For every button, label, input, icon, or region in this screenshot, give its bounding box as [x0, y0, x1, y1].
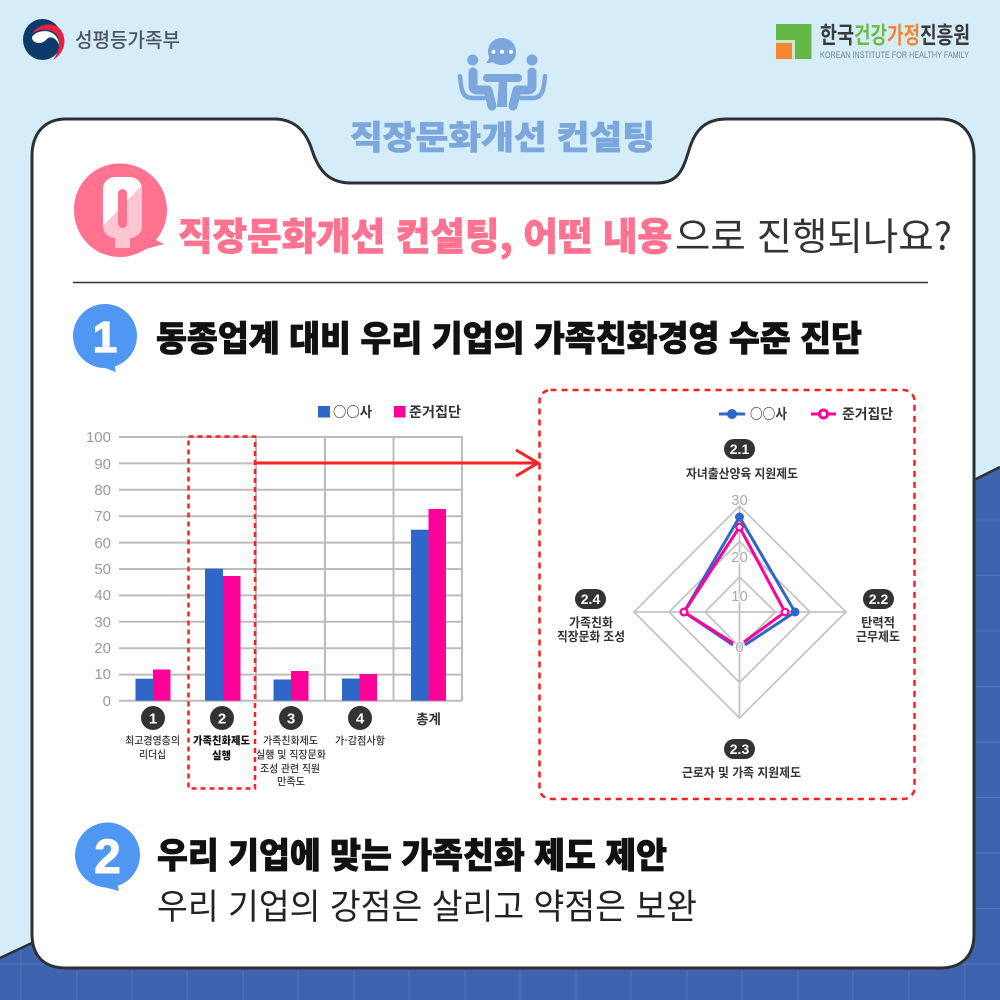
radar legend [719, 404, 893, 424]
radar axis values: 20 [731, 549, 748, 566]
icon: meeting at a table [460, 38, 545, 107]
axis label 2.4: 2.4 [581, 591, 600, 607]
category badges: 2 [218, 710, 226, 728]
logo: ministry emblem [23, 19, 64, 60]
axis label 2.3 [682, 739, 801, 781]
arrow to radar panel [255, 450, 538, 476]
radar axis values [731, 492, 748, 656]
icon: number 2 bubble [75, 822, 140, 891]
y axis labels: 50 [94, 561, 111, 578]
y axis labels: 80 [94, 482, 111, 499]
bar chart legend: 준거집단 [409, 402, 461, 422]
highlight box around category 2 [188, 436, 255, 788]
y axis labels: 90 [94, 456, 111, 473]
icon: number 2 bubble: 2 [94, 831, 121, 884]
radar grid [634, 506, 846, 718]
main title: 직장문화개선 컨설팅 [350, 111, 655, 159]
section 2 heading: 우리 기업에 맞는 가족친화 제도 제안 [157, 828, 667, 879]
background: blue grid corner [0, 467, 1000, 1000]
axis label 2.1: 자녀출산양육 지원제도 [686, 463, 798, 482]
question heading [178, 206, 952, 261]
section 1 heading: 동종업계 대비 우리 기업의 가족친화경영 수준 진단 [156, 311, 862, 362]
section 2 subtext: 우리 기업의 강점은 살리고 약점은 보완 [157, 879, 697, 930]
bar chart legend: ○○사 [333, 402, 372, 422]
question heading: 으로 진행되나요? [675, 206, 952, 261]
panel: radar chart [540, 390, 914, 799]
category badges: 3 [287, 710, 295, 728]
radar legend: ○○사 [750, 404, 787, 424]
category labels: 최고경영층의 [125, 733, 180, 748]
category labels: 실행 및 직장문화 [256, 747, 326, 762]
category badges [141, 706, 441, 730]
axis label 2.2 [856, 589, 900, 645]
radar series: reference group [681, 524, 788, 643]
icon: number 1 bubble [73, 304, 137, 372]
axis label 2.4 [557, 589, 625, 645]
axis label 2.3: 2.3 [730, 741, 749, 757]
y axis labels: 30 [94, 614, 111, 631]
axis label 2.1: 2.1 [730, 441, 749, 457]
category labels [125, 733, 385, 789]
y axis labels: 20 [94, 640, 111, 657]
y axis labels [86, 429, 111, 710]
category badges: 총계 [416, 708, 441, 728]
category labels: 조성 관련 직원 [260, 761, 320, 776]
KIHF name: 진흥원 [920, 16, 970, 50]
KIHF name: 건강 [854, 16, 887, 50]
radar axis values: 0 [735, 639, 744, 656]
category labels: 가-감점사항 [335, 733, 385, 748]
axis label 2.1 [686, 439, 798, 482]
bars [136, 509, 446, 701]
icon: Q speech bubble [74, 164, 167, 257]
logo: KIHF square [776, 24, 812, 59]
y axis labels: 40 [94, 587, 111, 604]
category badges: 4 [356, 710, 365, 728]
white card with notch [32, 119, 974, 968]
y axis labels: 60 [94, 535, 111, 552]
y axis labels: 10 [94, 666, 111, 683]
bar chart [86, 402, 462, 789]
radar legend: 준거집단 [842, 404, 893, 424]
category labels: 실행 [212, 748, 231, 763]
radar axis values: 10 [731, 588, 748, 605]
category labels: 가족친화제도 [193, 733, 250, 748]
axis label 2.3: 근로자 및 가족 지원제도 [682, 762, 801, 781]
axis label 2.2: 탄력적 [861, 612, 895, 631]
radar series: company [680, 512, 800, 645]
y axis labels: 100 [86, 429, 111, 446]
axis label 2.2: 근무제도 [856, 626, 900, 645]
category labels: 만족도 [277, 774, 305, 789]
category labels: 리더십 [139, 747, 166, 762]
icon: number 1 bubble: 1 [93, 313, 117, 362]
radar axis values: 30 [731, 492, 748, 509]
y axis labels: 70 [94, 508, 111, 525]
category badges: 1 [149, 710, 157, 728]
KIHF name: 한국 [820, 16, 854, 50]
axis label 2.4: 가족친화 [569, 612, 613, 631]
bar chart legend [318, 402, 461, 422]
axis label 2.2: 2.2 [869, 591, 888, 607]
y axis labels: 0 [103, 693, 111, 710]
KIHF name: 가정 [887, 16, 920, 50]
category labels: 가족친화제도 [263, 733, 318, 748]
KIHF name [820, 16, 970, 61]
question heading: 직장문화개선 컨설팅, 어떤 내용 [178, 206, 672, 261]
ministry name: 성평등가족부 [75, 24, 180, 53]
axis label 2.4: 직장문화 조성 [557, 626, 625, 645]
